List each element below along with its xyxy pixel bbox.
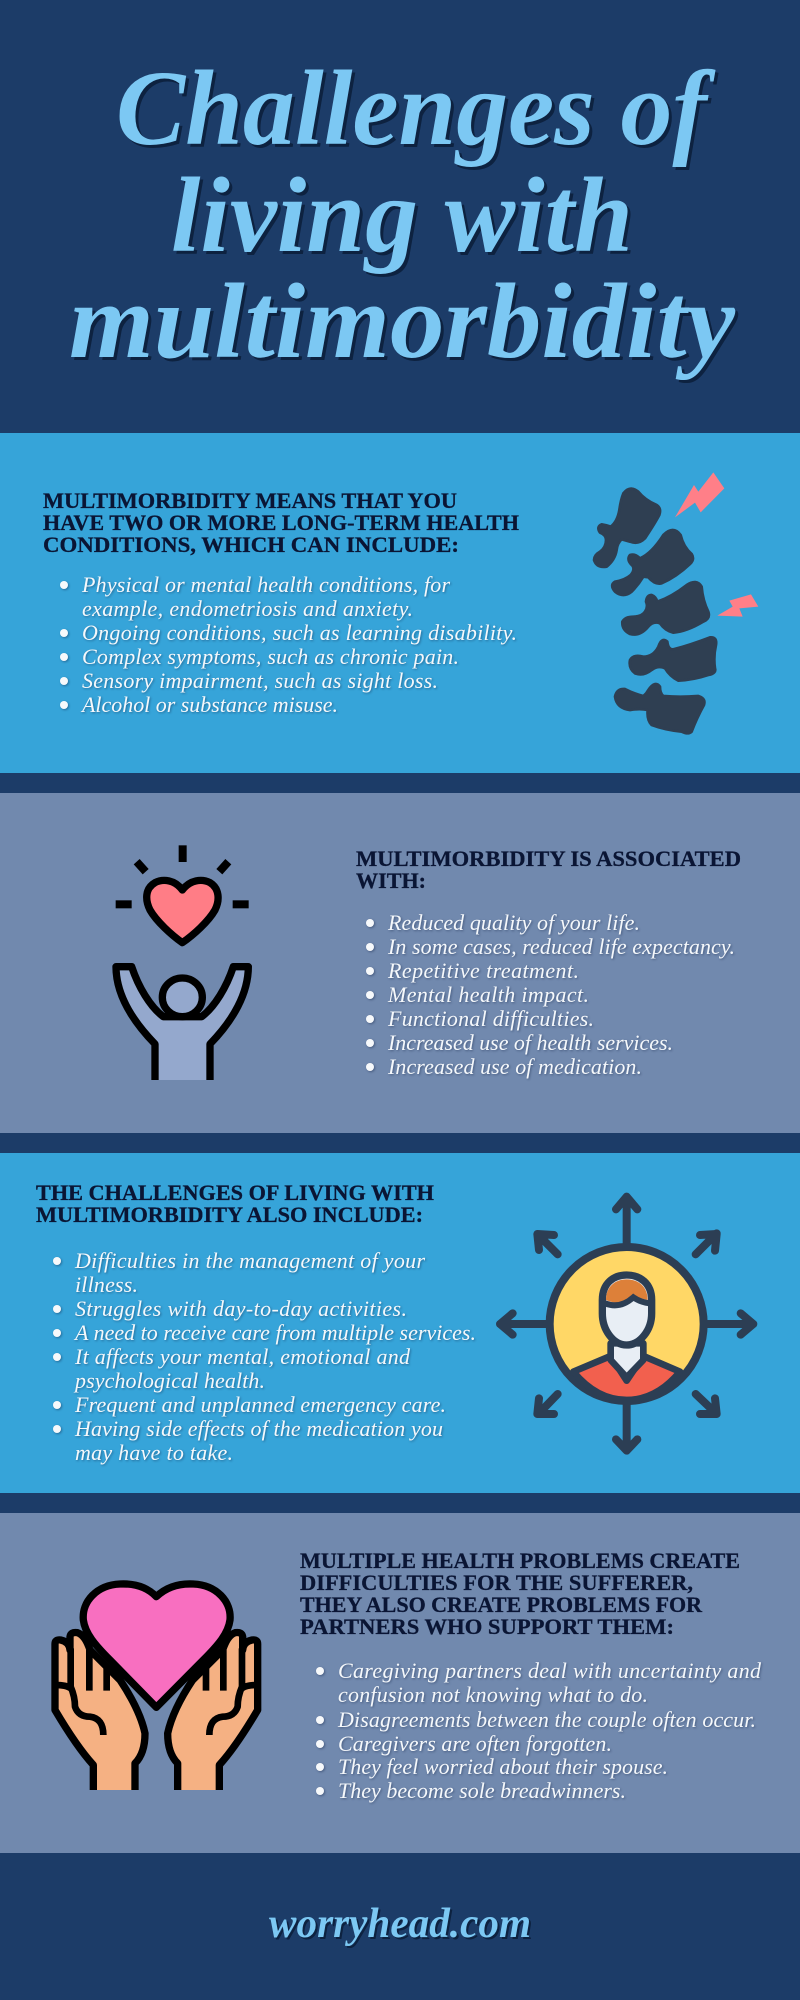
icon: person raising arms under a heart [116,845,249,1080]
title: Challenges of [116,50,716,168]
heading: associated with [356,846,741,893]
bullet list: conditions: Ongoing conditions, such as learning disability. [82,620,517,645]
heading: associated with: WITH: [356,868,426,893]
bullet list: conditions: Alcohol or substance misuse. [80,692,338,717]
bullet list: partner problems: Caregivers are often forgotten. [338,1731,612,1756]
icon: person with arrows pointing outward [500,1197,753,1451]
icon: hands holding a heart [55,1584,258,1790]
bullet list: associated outcomes: In some cases, reduced life expectancy. [387,934,735,959]
heading: problems for partners: DIFFICULTIES FOR THE SUFFERER, [300,1570,693,1595]
bullet list: associated outcomes: Mental health impact. [387,982,589,1007]
bullet list: associated outcomes: Reduced quality of your life. [387,910,640,935]
bullet list: partner problems: Caregiving partners deal with uncertainty and [338,1658,762,1683]
bullet list: partner problems: They feel worried about their spouse. [338,1754,668,1779]
heading: challenges also include: THE CHALLENGES OF LIVING WITH [36,1180,434,1205]
title [69,50,736,381]
bullet list: conditions: Physical or mental health conditions, for [81,572,450,597]
title: living with [171,157,633,275]
bullet list: challenges: may have to take. [75,1440,233,1465]
bullet list: challenges: Struggles with day-to-day activities. [75,1296,407,1321]
bullet list: challenges: Having side effects of the medication you [74,1416,443,1441]
bullet list: conditions: Complex symptoms, such as chronic pain. [82,644,459,669]
panel: challenges also include [0,1153,800,1493]
bullet list: conditions: Sensory impairment, such as sight loss. [82,668,438,693]
bullet list: conditions [60,572,517,717]
panel: associated with [0,793,800,1133]
heading: challenges also include: MULTIMORBIDITY ALSO INCLUDE: [36,1202,423,1227]
bullet list: conditions: example, endometriosis and anxiety. [82,596,413,621]
bullet list: partner problems: Disagreements between the couple often occur. [337,1707,756,1732]
bullet list: partner problems: confusion not knowing what to do. [338,1682,648,1707]
bullet list: associated outcomes: Increased use of health services. [387,1030,673,1055]
heading: multimorbidity means [43,488,519,557]
panel: problems for partners [0,1513,800,1853]
bullet list: associated outcomes [366,910,735,1079]
heading: multimorbidity means: HAVE TWO OR MORE LONG-TERM HEALTH [43,510,519,535]
bullet list: partner problems: They become sole breadwinners. [338,1778,626,1803]
bullet list: challenges: A need to receive care from multiple services. [73,1320,476,1345]
heading: problems for partners: PARTNERS WHO SUPPORT THEM: [300,1614,674,1639]
bullet list: associated outcomes: Increased use of medication. [387,1054,642,1079]
heading: problems for partners: MULTIPLE HEALTH PROBLEMS CREATE [300,1548,740,1573]
heading: problems for partners: THEY ALSO CREATE PROBLEMS FOR [300,1592,703,1617]
heading: multimorbidity means: CONDITIONS, WHICH CAN INCLUDE: [43,532,459,557]
title: multimorbidity [69,263,736,381]
bullet list: associated outcomes: Repetitive treatment. [387,958,579,983]
heading: problems for partners [300,1548,740,1639]
bullet list: challenges [53,1248,476,1465]
heading: multimorbidity means: MULTIMORBIDITY MEANS THAT YOU [43,488,457,513]
heading: associated with: MULTIMORBIDITY IS ASSOCIATED [356,846,741,871]
heading: challenges also include [36,1180,434,1227]
bullet list: challenges: psychological health. [73,1368,265,1393]
bullet list: challenges: It affects your mental, emotional and [74,1344,411,1369]
bullet list: challenges: Frequent and unplanned emergency care. [74,1392,446,1417]
bullet list: partner problems [316,1658,762,1803]
bullet list: challenges: illness. [75,1272,138,1297]
panel: what multimorbidity means [0,433,800,773]
icon: spine with pain bolts [594,472,758,733]
footer: website: worryhead.com [269,1901,531,1947]
bullet list: associated outcomes: Functional difficulties. [387,1006,594,1031]
bullet list: challenges: Difficulties in the management of your [74,1248,425,1273]
